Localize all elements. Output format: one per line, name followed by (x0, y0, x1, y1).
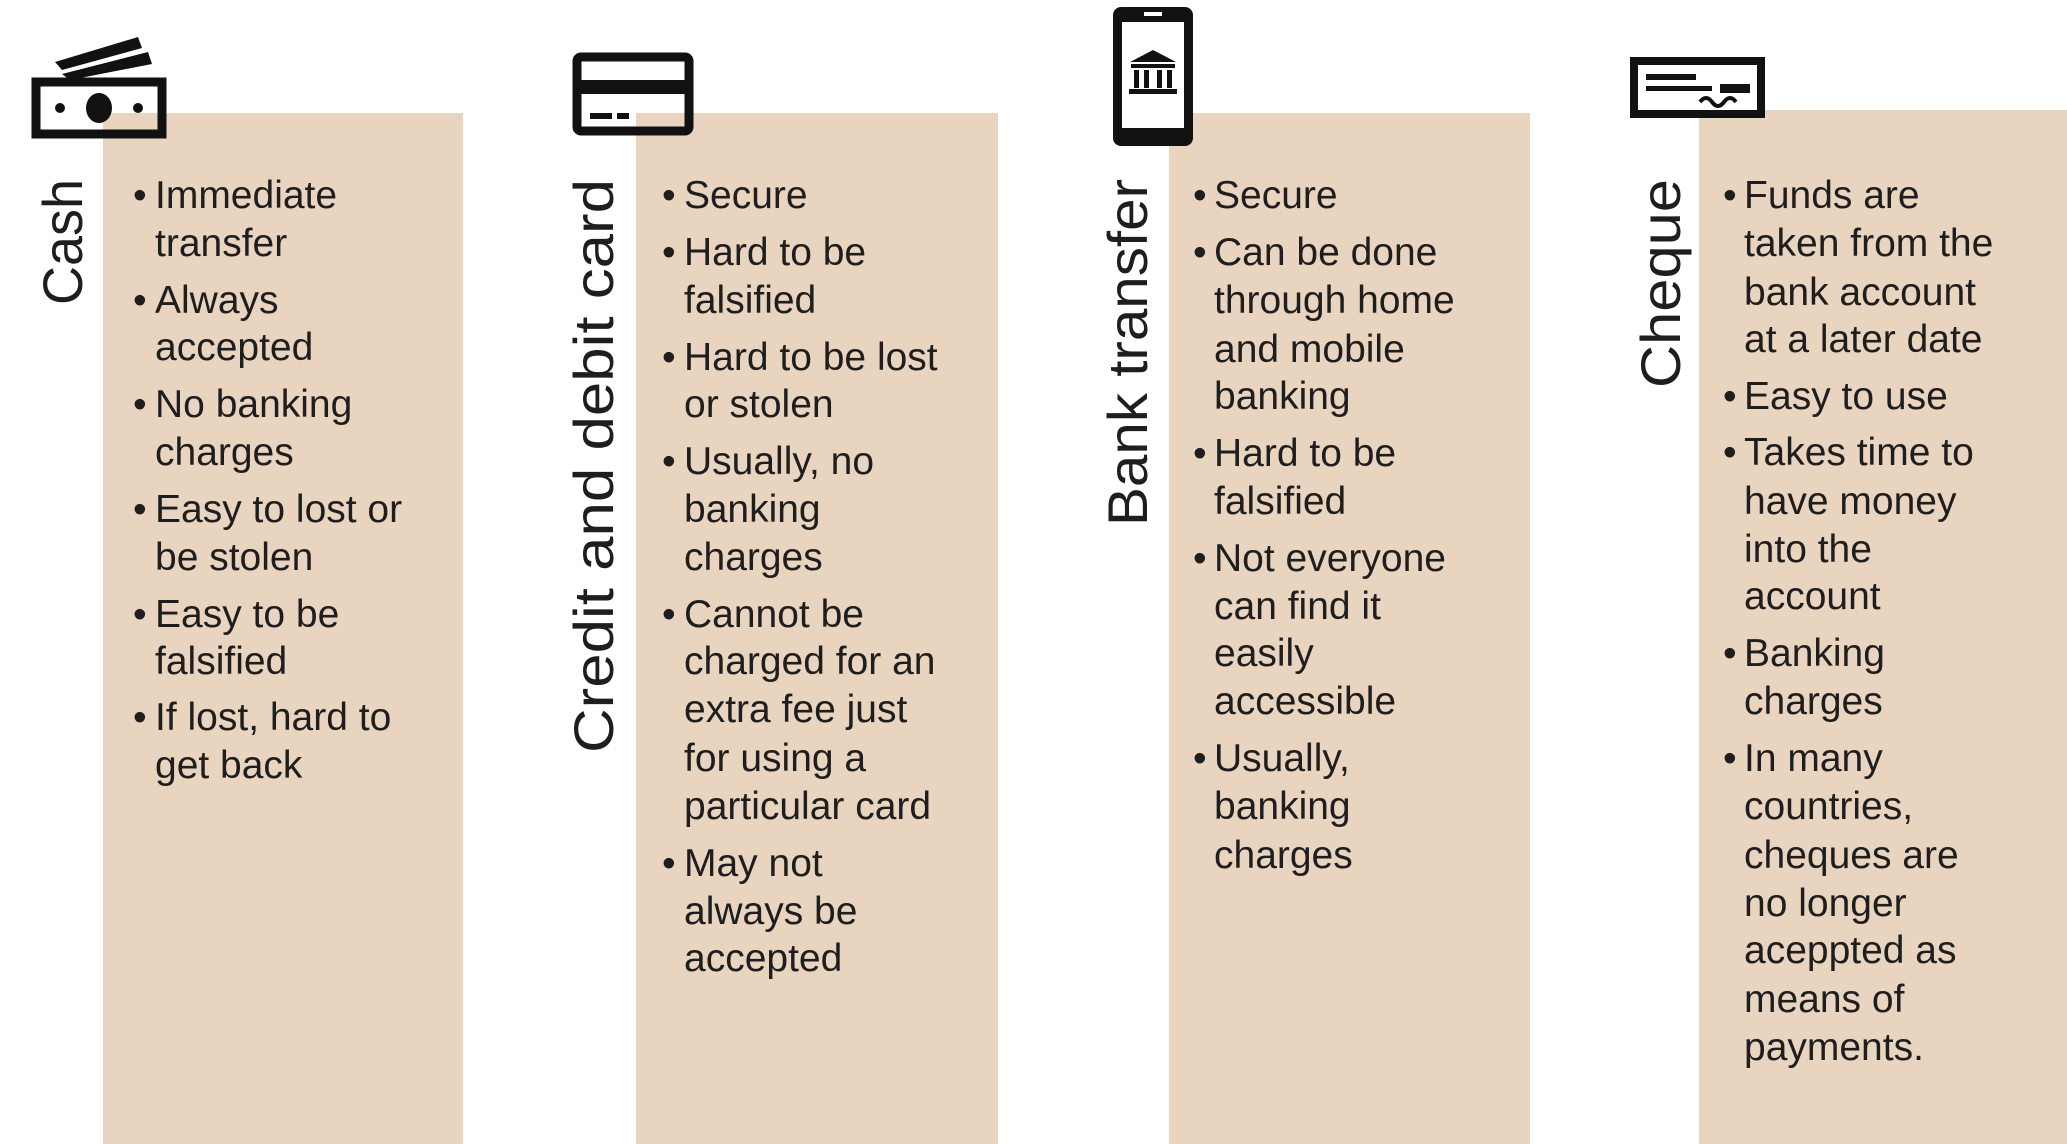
cash bullets: Easy to be (155, 593, 339, 636)
panel: cheque (1699, 110, 2067, 1144)
cheque bullets: have money (1744, 480, 1957, 523)
cash bullets: No banking (155, 383, 352, 426)
icon: card (577, 57, 689, 131)
cheque bullets: payments. (1744, 1026, 1924, 1069)
card bullets: banking (684, 488, 821, 531)
icon: cheque (1634, 61, 1761, 114)
card bullets: charged for an (684, 640, 936, 683)
bank bullets: banking (1214, 375, 1351, 418)
cash bullets: falsified (155, 640, 287, 683)
card bullets: • (662, 593, 676, 636)
cheque bullets: at a later date (1744, 318, 1982, 361)
bank bullets: banking (1214, 785, 1351, 828)
card bullets: Usually, no (684, 440, 874, 483)
bank bullets: • (1193, 174, 1207, 217)
cheque bullets: countries, (1744, 785, 1913, 828)
bank bullets: • (1193, 537, 1207, 580)
cheque bullets: cheques are (1744, 834, 1959, 877)
card bullets: May not (684, 842, 823, 885)
bank bullets: charges (1214, 834, 1353, 877)
cash bullets: Easy to lost or (155, 488, 402, 531)
bank bullets: and mobile (1214, 328, 1405, 371)
cheque bullets: In many (1744, 737, 1883, 780)
cheque bullets: no longer (1744, 882, 1907, 925)
cheque bullets (1723, 174, 1993, 1069)
title: Credit and debit card: Credit and debit card (562, 179, 625, 753)
card bullets: accepted (684, 937, 842, 980)
panel: card (636, 113, 998, 1144)
cash bullets: Immediate (155, 174, 337, 217)
bank bullets: accessible (1214, 680, 1396, 723)
bank bullets: falsified (1214, 480, 1346, 523)
card bullets: extra fee just (684, 688, 907, 731)
panel: cash (103, 113, 463, 1144)
bank bullets: Secure (1214, 174, 1338, 217)
cash bullets: get back (155, 744, 303, 787)
cheque bullets: • (1723, 174, 1737, 217)
cash bullets: If lost, hard to (155, 696, 391, 739)
cheque bullets: taken from the (1744, 222, 1993, 265)
cash bullets: • (133, 383, 147, 426)
card bullets: • (662, 440, 676, 483)
icon: phone with bank (1113, 7, 1193, 146)
card bullets: • (662, 336, 676, 379)
cheque bullets: Takes time to (1744, 431, 1974, 474)
card bullets: • (662, 231, 676, 274)
bank bullets: can find it (1214, 585, 1381, 628)
title: Cash: Cash (31, 179, 94, 305)
card bullets: for using a (684, 737, 866, 780)
bank bullets: • (1193, 231, 1207, 274)
cash bullets: • (133, 279, 147, 322)
cash bullets: accepted (155, 326, 313, 369)
card bullets: always be (684, 890, 857, 933)
cheque bullets: aceppted as (1744, 929, 1957, 972)
bank bullets: • (1193, 432, 1207, 475)
cash bullets: • (133, 488, 147, 531)
panel: bank transfer (1169, 113, 1530, 1144)
cash bullets (133, 174, 402, 787)
card bullets: or stolen (684, 383, 834, 426)
cash bullets: charges (155, 431, 294, 474)
cheque bullets: account (1744, 575, 1881, 618)
cash bullets: • (133, 696, 147, 739)
bank bullets: Hard to be (1214, 432, 1396, 475)
card bullets: Cannot be (684, 593, 864, 636)
title: Bank transfer: Bank transfer (1096, 179, 1159, 526)
cheque bullets: Easy to use (1744, 375, 1948, 418)
cheque bullets: charges (1744, 680, 1883, 723)
cheque bullets: Banking (1744, 632, 1885, 675)
cash bullets: Always (155, 279, 279, 322)
title: Cheque: Cheque (1629, 179, 1692, 388)
card bullets: • (662, 174, 676, 217)
card bullets: particular card (684, 785, 931, 828)
bank bullets: easily (1214, 632, 1314, 675)
icon: cash (36, 37, 162, 134)
cash bullets: • (133, 593, 147, 636)
bank bullets: Can be done (1214, 231, 1437, 274)
bank bullets: Usually, (1214, 737, 1350, 780)
card bullets: • (662, 842, 676, 885)
card bullets (662, 174, 938, 980)
cash bullets: transfer (155, 222, 287, 265)
card bullets: falsified (684, 279, 816, 322)
cheque bullets: • (1723, 632, 1737, 675)
bank bullets: Not everyone (1214, 537, 1446, 580)
cheque bullets: into the (1744, 528, 1872, 571)
cheque bullets: • (1723, 375, 1737, 418)
cash bullets: be stolen (155, 536, 313, 579)
card bullets: Secure (684, 174, 808, 217)
cash bullets: • (133, 174, 147, 217)
cheque bullets: • (1723, 737, 1737, 780)
cheque bullets: • (1723, 431, 1737, 474)
bank bullets: through home (1214, 279, 1455, 322)
cheque bullets: bank account (1744, 271, 1976, 314)
cheque bullets: means of (1744, 978, 1905, 1021)
cheque bullets: Funds are (1744, 174, 1920, 217)
card bullets: Hard to be lost (684, 336, 938, 379)
card bullets: Hard to be (684, 231, 866, 274)
bank bullets: • (1193, 737, 1207, 780)
bank bullets (1193, 174, 1455, 877)
card bullets: charges (684, 536, 823, 579)
